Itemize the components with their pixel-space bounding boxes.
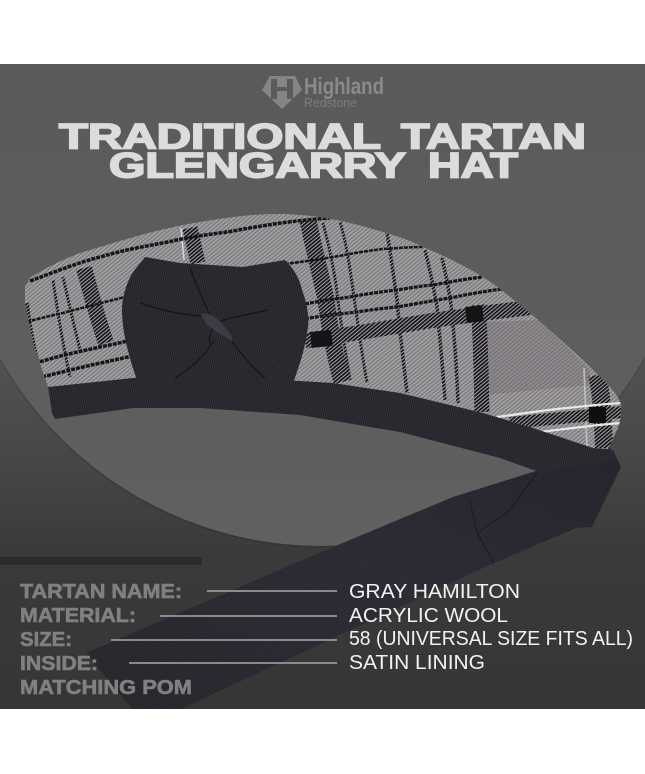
- bow: [122, 257, 308, 383]
- specification labels: INSIDE:: [20, 652, 98, 675]
- lower right stripes: [510, 412, 622, 423]
- hat band: [48, 375, 618, 472]
- specification labels: MATERIAL:: [20, 604, 136, 627]
- tartan crown: [25, 214, 621, 449]
- large light circle backdrop: [0, 0, 645, 548]
- specification values: GRAY HAMILTON: [349, 580, 520, 603]
- ribbon tail: [86, 450, 621, 709]
- horizontal tartan stripes: [27, 218, 503, 377]
- specification labels: SIZE:: [20, 628, 72, 651]
- logo: Highland Redstone: Redstone: [304, 95, 357, 110]
- right shaded block: [484, 320, 590, 395]
- title: [59, 117, 586, 185]
- specification values: SATIN LINING: [349, 651, 485, 674]
- specification labels: MATCHING POM: [20, 676, 192, 699]
- divider bar: [0, 557, 202, 565]
- title: GLENGARRY: [109, 146, 406, 185]
- connector lines: [111, 591, 337, 663]
- specification labels: TARTAN NAME:: [20, 580, 182, 603]
- specification values: ACRYLIC WOOL: [349, 604, 508, 627]
- specification values: [349, 580, 633, 674]
- title: TARTAN: [401, 117, 586, 156]
- hat: [25, 214, 621, 472]
- logo: Highland Redstone: [262, 73, 384, 110]
- specification labels: [20, 580, 192, 699]
- logo: Highland Redstone: Highland: [304, 73, 384, 99]
- vertical tartan stripes: [27, 220, 604, 448]
- bow knot: [140, 268, 268, 378]
- title: HAT: [428, 146, 518, 185]
- specification values: 58 (UNIVERSAL SIZE FITS ALL): [349, 627, 633, 650]
- title: TRADITIONAL: [59, 117, 381, 156]
